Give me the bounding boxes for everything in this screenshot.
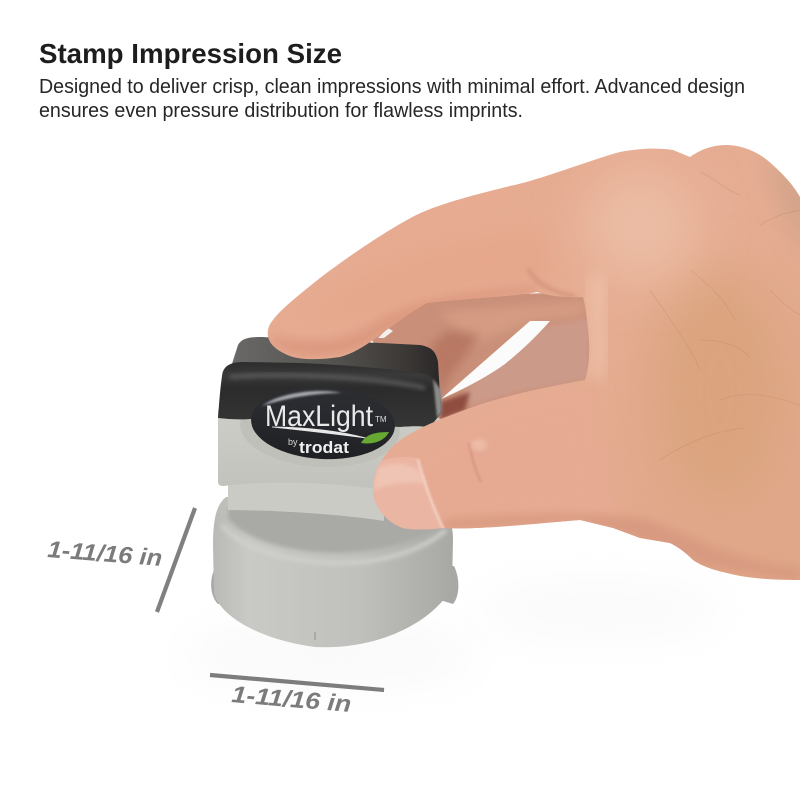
base flange <box>211 566 458 604</box>
logo: trademark: TM <box>375 415 387 424</box>
description text <box>39 76 745 122</box>
thumb joint highlight <box>471 439 487 451</box>
stamp <box>211 337 458 647</box>
cylinder ridge highlight <box>222 525 446 563</box>
dimension line: width <box>210 675 384 690</box>
thumbnail <box>372 457 444 530</box>
badge swoosh <box>272 427 366 438</box>
hand base colour <box>260 140 800 585</box>
grey housing <box>218 400 442 490</box>
title: Stamp Impression Size <box>39 38 342 69</box>
badge gloss <box>262 391 342 406</box>
hair and skin lines <box>650 172 800 460</box>
ring finger <box>462 318 590 406</box>
hand <box>260 140 800 585</box>
center mark <box>314 632 316 640</box>
logo: MaxLight: MaxLight <box>265 400 374 433</box>
logo: trodat: trodat <box>299 438 349 457</box>
top right shaded edge <box>770 162 800 235</box>
dark corner beneath gap <box>440 392 470 420</box>
description text: ensures even pressure distribution for flawless imprints. <box>39 100 523 122</box>
description text: Designed to deliver crisp, clean impressions with minimal effort. Advanced design <box>39 76 745 98</box>
thumbnail edge <box>418 459 444 530</box>
fold along palm <box>594 275 599 378</box>
cap highlight <box>230 375 425 388</box>
thumbnail band <box>374 464 422 488</box>
cap right edge reflection <box>433 379 442 418</box>
middle finger upper tone <box>440 300 585 345</box>
rear top of housing <box>230 337 440 395</box>
back of hand warm tone <box>650 273 785 494</box>
badge ring <box>238 385 402 471</box>
thumb lower shading <box>440 514 800 582</box>
cylinder body <box>213 495 453 647</box>
dimension label: depth: 1-11/16 in <box>47 536 163 571</box>
thumb colour <box>424 422 594 528</box>
dimension line: depth <box>157 508 195 612</box>
soft surface shadow <box>180 585 730 680</box>
badge <box>249 383 397 463</box>
shadow beside stamp <box>430 330 480 400</box>
stamp neck <box>228 480 384 521</box>
leaf <box>361 432 389 443</box>
index finger shading <box>300 225 560 320</box>
fold at index knuckle <box>528 268 575 296</box>
dimension label: width: 1-11/16 in <box>231 681 352 717</box>
sliver above stamp <box>378 328 393 338</box>
knuckle highlight <box>585 170 695 280</box>
black cap <box>218 362 442 427</box>
gap between fingers <box>441 321 550 399</box>
cylinder recess <box>228 505 438 553</box>
index fingertip lower shadow <box>272 286 540 357</box>
back fingers behind stamp <box>370 292 600 430</box>
logo: by: by <box>288 437 298 447</box>
thumb joint crease <box>469 443 481 482</box>
